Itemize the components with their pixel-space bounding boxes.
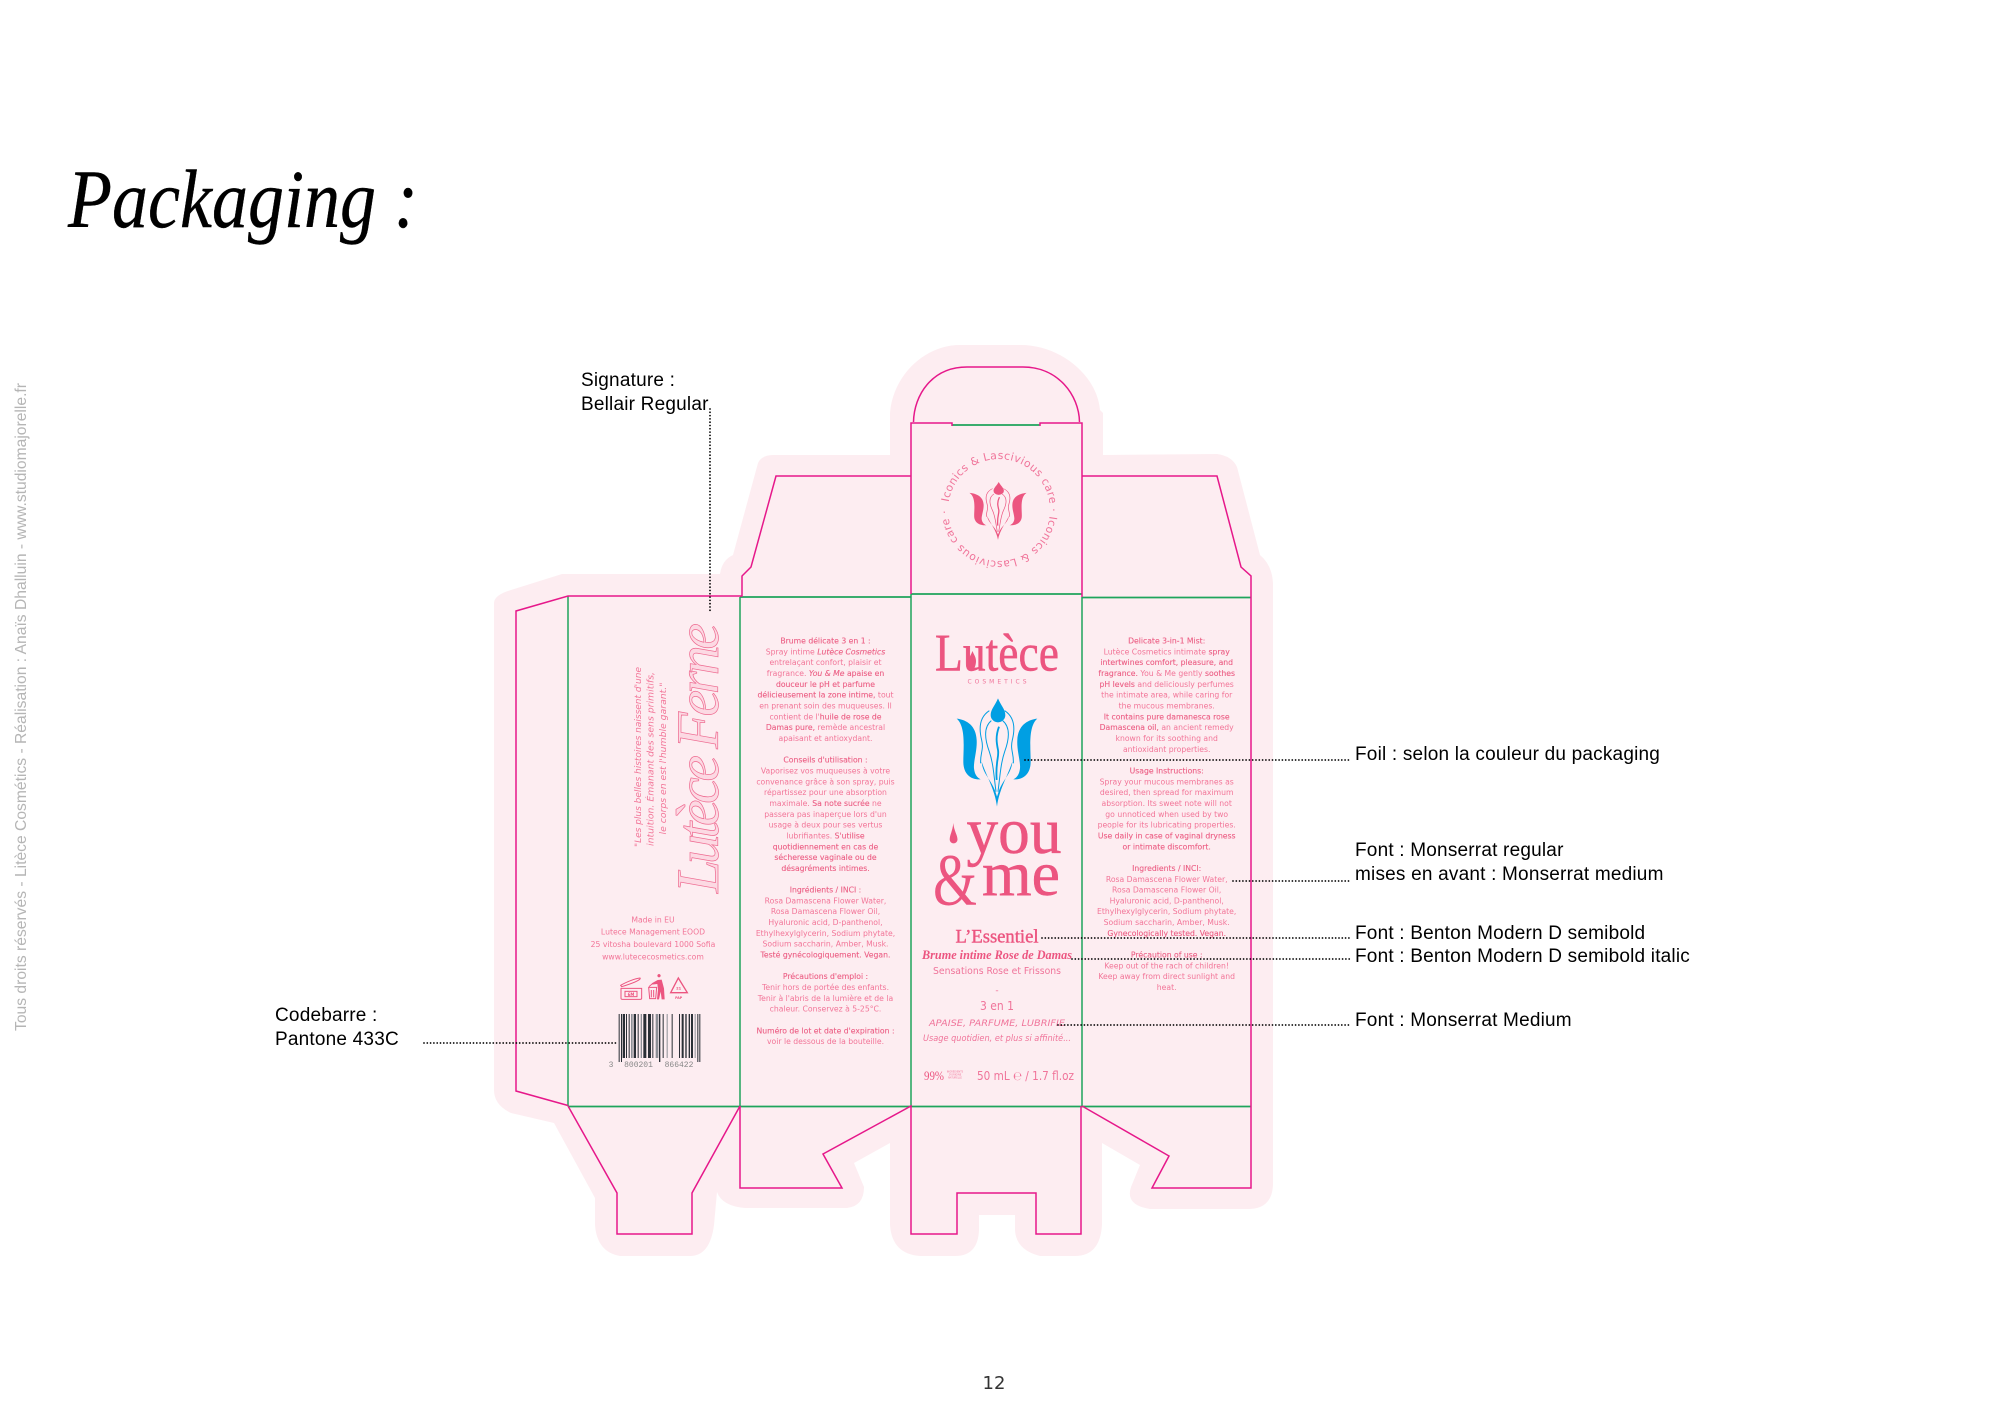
leader: Benton semibold	[1042, 937, 1350, 939]
panel: English text: heat.	[1157, 983, 1177, 992]
label: font Benton italic: Font : Benton Modern D semibold italic	[1355, 946, 1690, 967]
panel: English text: Damascena oil, an ancient remedy	[1100, 723, 1234, 732]
brand logo: Lutèce	[935, 624, 1059, 682]
label: signature	[581, 370, 709, 415]
panel: French text: Conseils d'utilisation :	[783, 756, 868, 765]
volume line: 50 mL ℮ / 1.7 fl.oz	[977, 1069, 1074, 1083]
product name: you & me: &	[933, 840, 977, 922]
leader: Benton italic	[1072, 958, 1350, 960]
volume line: INGRÉDIENTS	[947, 1070, 964, 1074]
volume line: 99%	[924, 1069, 944, 1083]
leader: Monserrat medium	[1058, 1024, 1350, 1026]
panel: French text: Sodium saccharin, Amber, Musk.	[762, 940, 889, 949]
icons: care symbols: 21	[676, 986, 682, 990]
panel: English text: Sodium saccharin, Amber, Musk.	[1104, 918, 1230, 927]
panel: English text: Lutèce Cosmetics intimate spray	[1104, 647, 1230, 656]
panel: English text: Keep away from direct sunlight and	[1098, 972, 1235, 981]
panel: English text: It contains pure damanesca rose	[1104, 712, 1230, 721]
panel: English text: Rosa Damascena Flower Water,	[1106, 875, 1228, 884]
halo background	[494, 345, 1273, 1256]
icons: care symbols: 6M	[628, 992, 634, 997]
brand logo: COSMETICS	[968, 678, 1027, 686]
panel: French text: Testé gynécologiquement. Vegan.	[760, 951, 890, 960]
panel: French text: chaleur. Conservez à 5-25°C.	[770, 1005, 881, 1014]
panel: front face: Brume intime Rose de Damas	[921, 947, 1072, 962]
page number: 12	[983, 1373, 1005, 1394]
green fold lines	[568, 425, 1251, 1106]
panel: English text: intertwines comfort, pleasure, and	[1100, 658, 1233, 667]
panel: French text: Spray intime Lutèce Cosmetics	[766, 647, 885, 656]
label: signature: Bellair Regular	[581, 394, 709, 415]
product name: you & me	[933, 795, 1062, 922]
quote: intuition. Émanant des sens primitifs,	[644, 672, 656, 846]
panel: French text: Tenir à l'abris de la lumière et de la	[757, 994, 893, 1003]
panel: French text: convenance grâce à son spray, puis	[756, 777, 895, 786]
panel: English text: Usage Instructions:	[1130, 766, 1204, 776]
panel: French text: Rosa Damascena Flower Oil,	[771, 907, 880, 916]
leader: signature	[709, 409, 711, 612]
panel: front face: Sensations Rose et Frissons	[933, 966, 1061, 977]
company address: 25 vitosha boulevard 1000 Sofia	[591, 940, 716, 949]
label: font Monserrat regular: Font : Monserrat regular	[1355, 840, 1564, 861]
panel: French text: désagréments intimes.	[781, 864, 870, 873]
volume line: NATURELLE	[948, 1076, 962, 1080]
panel: French text: Rosa Damascena Flower Water,	[765, 896, 886, 905]
label: font Benton semibold: Font : Benton Modern D semibold	[1355, 923, 1645, 944]
label: font Monserrat regular	[1355, 840, 1664, 885]
panel: front face: APAISE, PARFUME, LUBRIFIE	[928, 1019, 1065, 1029]
top panel emblem	[941, 452, 1058, 568]
barcode: 866422	[665, 1061, 694, 1070]
product name: you & me: you	[966, 795, 1062, 868]
title: Packaging :	[67, 153, 418, 245]
panel: signature side	[591, 623, 731, 1070]
panel: English text: fragrance. You & Me gently soothes	[1098, 669, 1235, 678]
panel: English text	[1097, 636, 1236, 992]
product subtitle: L’Essentiel	[956, 927, 1038, 948]
icons: care symbols: PAP	[675, 996, 683, 1000]
panel: front face: 3 en 1	[980, 999, 1014, 1013]
barcode: 800201	[624, 1061, 653, 1070]
volume line	[924, 1069, 1074, 1083]
quote	[634, 667, 669, 847]
panel: French text	[756, 636, 895, 1046]
label: font Monserrat regular: mises en avant : Monserrat medium	[1355, 864, 1664, 885]
panel: English text: Keep out of the rach of children!	[1104, 961, 1229, 970]
panel: English text: known for its soothing and	[1116, 734, 1218, 743]
panel: French text: en prenant soin des muqueuses. Il	[759, 702, 892, 710]
packaging dieline	[494, 345, 1273, 1256]
panel: French text: contient de l'huile de rose de	[769, 712, 882, 721]
panel: English text: pH levels and deliciously perfumes	[1100, 680, 1234, 689]
product name: you & me: me	[982, 839, 1060, 909]
panel: French text: entrelaçant confort, plaisir et	[769, 658, 882, 667]
panel: English text: absorption. Its sweet note will not	[1102, 799, 1232, 808]
leader: Monserrat regular	[1233, 880, 1350, 882]
label: font Monserrat medium: Font : Monserrat Medium	[1355, 1010, 1572, 1031]
panel: French text: répartissez pour une absorption	[764, 788, 887, 797]
panel: front face: Usage quotidien, et plus si affinité...	[923, 1033, 1071, 1044]
panel: English text: Hyaluronic acid, D-panthenol,	[1110, 896, 1224, 905]
panel: French text: Ingrédients / INCI :	[790, 886, 861, 895]
signature: Lutèce Ferne	[665, 623, 731, 894]
panel: French text: usage à deux pour ses vertus	[769, 821, 882, 830]
leader: barcode	[424, 1042, 617, 1044]
panel: front face: -	[995, 986, 999, 996]
panel: English text: Rosa Damascena Flower Oil,	[1112, 886, 1221, 895]
panel: French text: Précautions d'emploi :	[783, 972, 868, 981]
quote: "Les plus belles histoires naissent d'une	[634, 667, 644, 847]
panel: French text: Ethylhexylglycerin, Sodium phytate,	[756, 929, 895, 938]
icon: pink tulip	[969, 482, 1027, 540]
panel: English text: desired, then spread for maximum	[1100, 788, 1233, 797]
company address: Made in EU	[631, 916, 675, 924]
company address: www.lutececosmetics.com	[602, 952, 704, 962]
panel: French text: apaisant et antioxydant.	[779, 734, 872, 743]
barcode: 3	[609, 1061, 614, 1070]
label: signature: Signature :	[581, 370, 675, 391]
panel: French text: fragrance. You & Me apaise en	[767, 669, 884, 678]
panel: English text: or intimate discomfort.	[1123, 842, 1211, 851]
company address: Lutece Management EOOD	[601, 928, 705, 936]
panel: French text: maximale. Sa note sucrée ne	[769, 799, 882, 808]
panel: French text: lubrifiantes. S'utilise	[786, 831, 865, 840]
label: barcode: Codebarre :	[275, 1005, 378, 1026]
panel: French text: voir le dessous de la bouteille.	[767, 1037, 884, 1046]
panel: English text: Spray your mucous membranes as	[1100, 777, 1234, 786]
company address	[591, 916, 716, 962]
panel: English text: people for its lubricating properties.	[1098, 821, 1236, 830]
panel: front face	[921, 624, 1074, 1083]
panel: French text: Brume délicate 3 en 1 :	[780, 636, 871, 646]
panel: English text: antioxidant properties.	[1123, 745, 1210, 754]
panel: English text: Précaution of use :	[1131, 951, 1203, 960]
panel: English text: Ethylhexylglycerin, Sodium phytate,	[1097, 907, 1236, 916]
circular slogan: Iconics & Lascivious care · Iconics & Lascivious care ·	[941, 452, 1058, 568]
panel: French text: Damas pure, remède ancestral	[766, 723, 885, 732]
panel: French text: passera pas inaperçue lors d'un	[764, 810, 887, 819]
icon: blue foil tulip	[957, 698, 1037, 807]
panel: English text: Delicate 3-in-1 Mist:	[1128, 636, 1205, 646]
quote: le corps en est l'humble garant."	[659, 682, 669, 834]
magenta cut lines	[516, 367, 1251, 1234]
label: barcode: Pantone 433C	[275, 1029, 399, 1050]
panel: French text: sécheresse vaginale ou de	[774, 853, 877, 862]
panel: French text: douceur le pH et parfume	[776, 680, 875, 689]
panel: English text: the mucous membranes.	[1119, 702, 1215, 710]
panel: French text: Numéro de lot et date d'expiration :	[756, 1026, 895, 1035]
panel: English text: Use daily in case of vaginal dryness	[1098, 831, 1236, 840]
label: barcode	[275, 1005, 399, 1050]
panel: English text: go unnoticed when used by two	[1105, 810, 1228, 819]
barcode	[609, 1014, 700, 1070]
panel: English text: the intimate area, while caring for	[1101, 691, 1233, 700]
label: foil: Foil : selon la couleur du packaging	[1355, 744, 1660, 765]
panel: French text: Tenir hors de portée des enfants.	[761, 983, 889, 992]
leader: foil	[1025, 759, 1350, 761]
panel: English text: Gynecologically tested. Vegan.	[1107, 929, 1226, 938]
panel: French text: Hyaluronic acid, D-panthenol,	[768, 918, 883, 927]
panel: French text: délicieusement la zone intime, tout	[757, 691, 894, 700]
side credit: Tous droits réservés - Litèce Cosmétics - Réalisation : Anaïs Dhalluin - www.studiomajorelle.fr	[13, 383, 30, 1031]
icons: care symbols	[621, 974, 687, 1000]
panel: French text: quotidiennement en cas de	[773, 842, 878, 851]
panel: French text: Vaporisez vos muqueuses à votre	[761, 766, 890, 776]
panel: English text: Ingredients / INCI:	[1132, 864, 1201, 873]
volume line: D'ORIGINE	[949, 1074, 962, 1076]
